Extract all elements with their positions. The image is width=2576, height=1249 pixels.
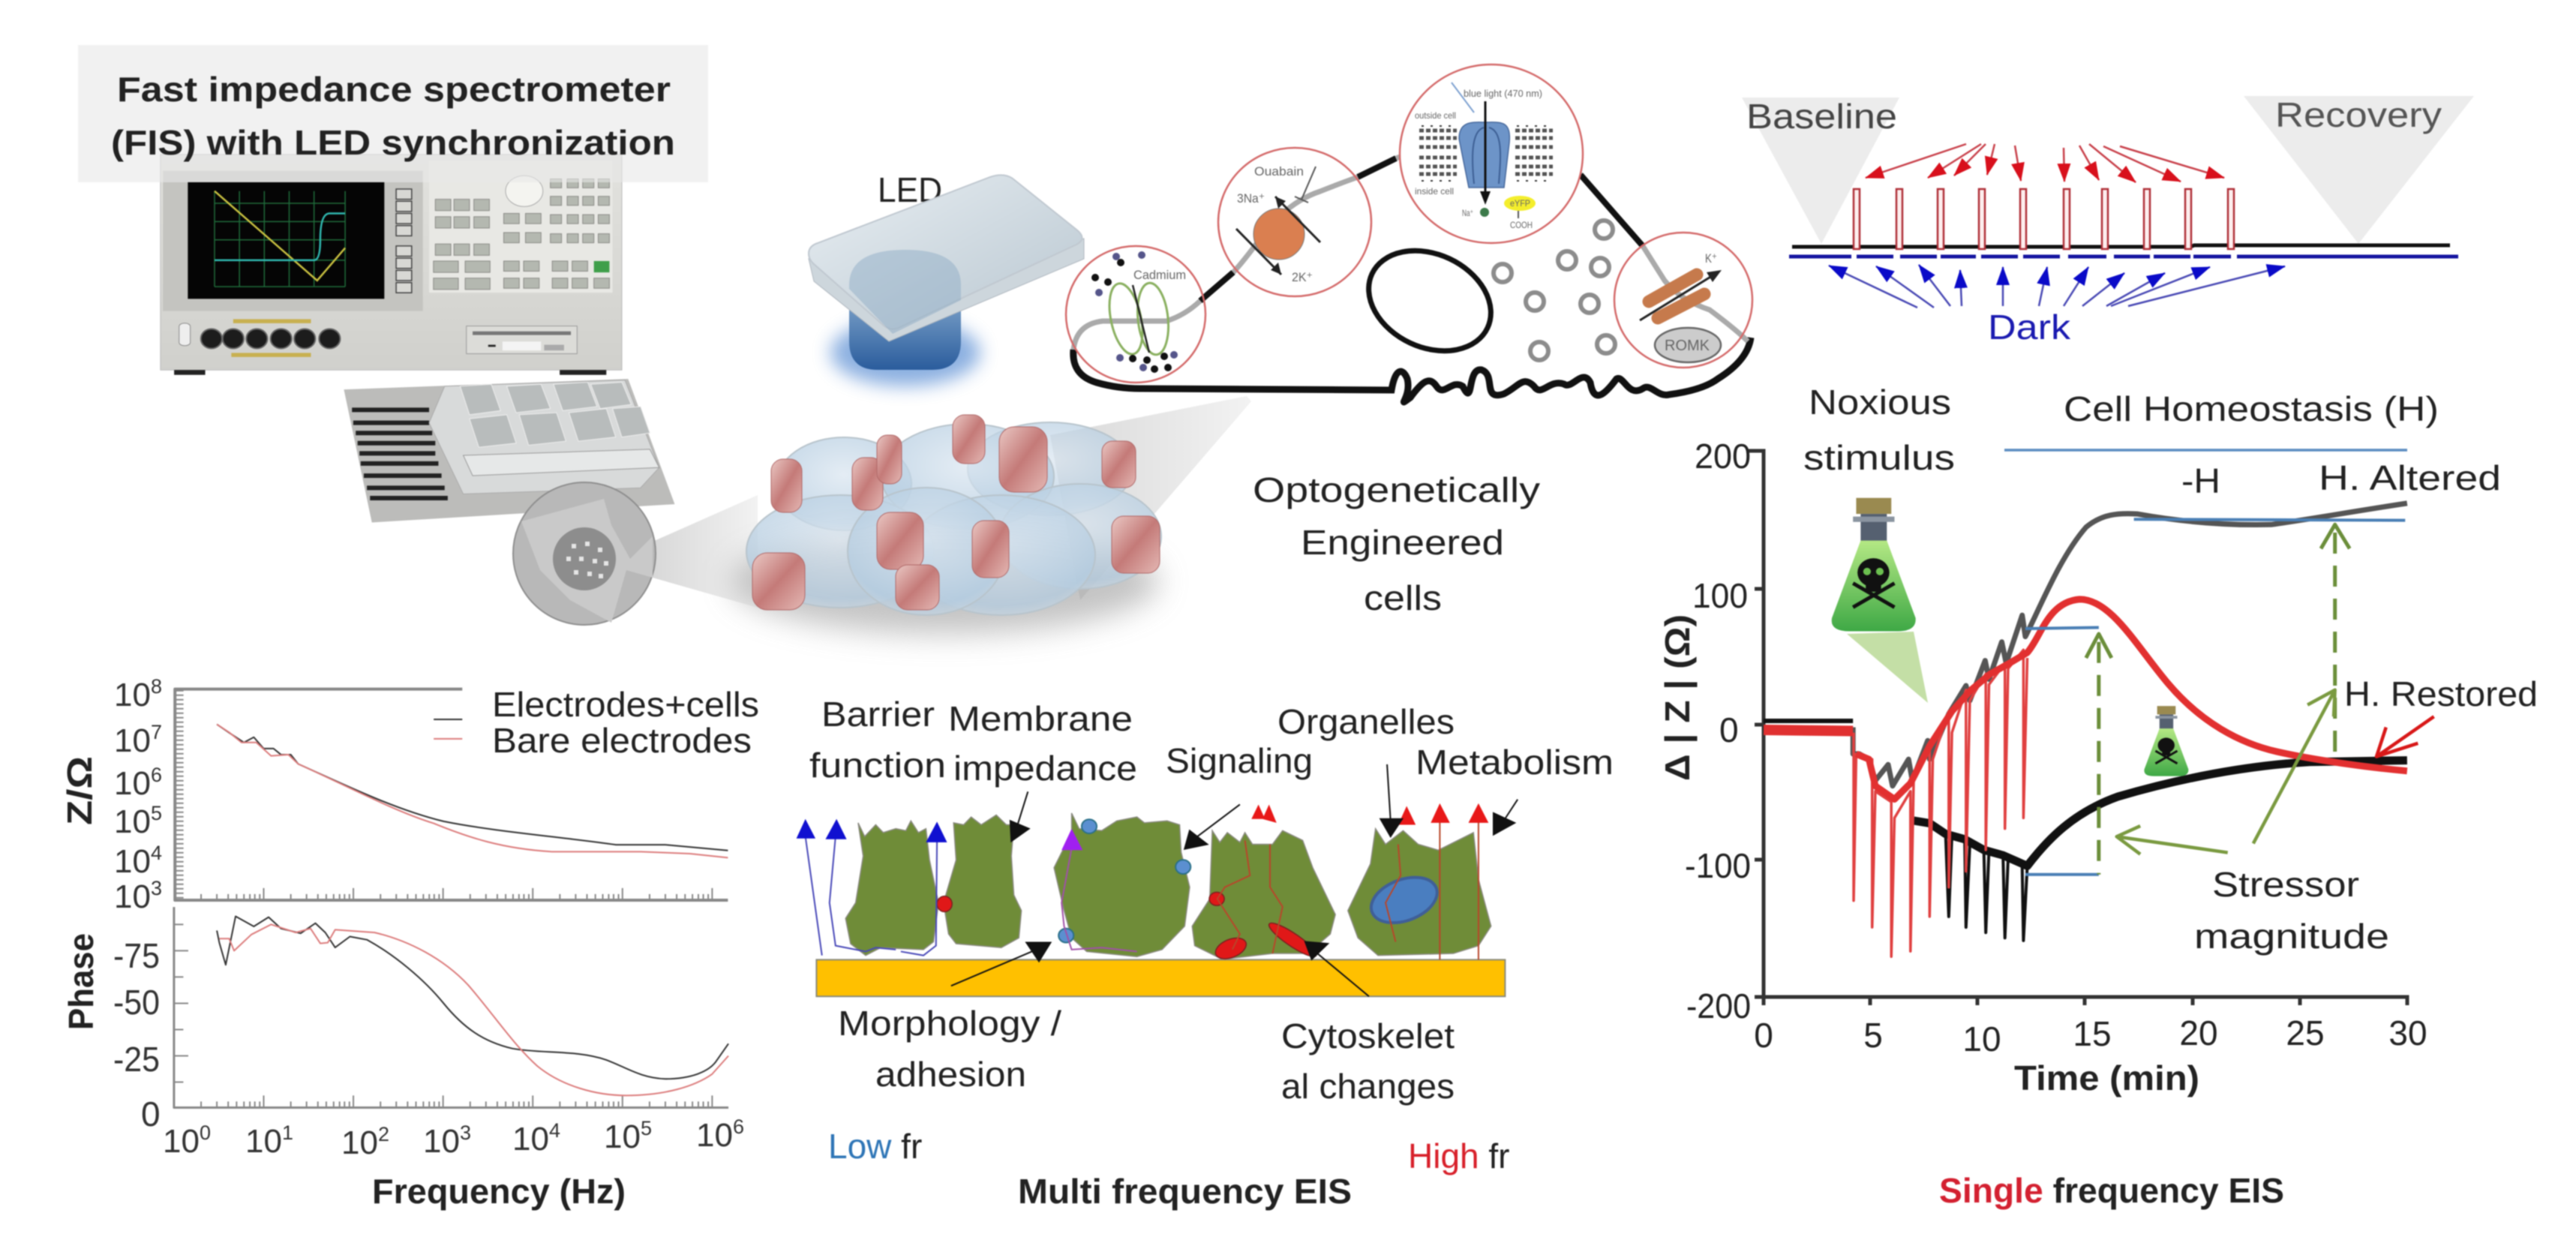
x tick labels: 10 [423, 1123, 460, 1160]
icon: small poison flask [2144, 706, 2188, 776]
label: cadmium: Cadmium [1133, 268, 1186, 282]
y tick labels: 6 [151, 764, 162, 786]
label: membrane impedance: Membrane [948, 699, 1133, 738]
title text: Fast impedance spectrometer [117, 70, 671, 109]
label: ouabain: Ouabain [1254, 164, 1304, 179]
y tick labels: 100 [1692, 576, 1748, 615]
trace: black control [1764, 719, 1853, 723]
label: H. altered: H. Altered [2319, 458, 2501, 497]
label: membrane impedance: impedance [953, 749, 1137, 788]
caption: single frequency EIS: Single frequency EIS [1939, 1171, 2284, 1210]
floppy drive [467, 326, 577, 354]
legend keys [434, 719, 462, 720]
y tick labels: 10 [114, 677, 151, 713]
stressor arrows [2117, 690, 2335, 854]
title box [78, 45, 708, 182]
x axis title: Frequency (Hz) [372, 1172, 626, 1211]
electrode bar [816, 959, 1505, 996]
x tick labels: 10 [341, 1124, 378, 1161]
chart: bode magnitude [60, 675, 759, 915]
red organelles [937, 892, 1321, 963]
trace: red recovery [1764, 730, 1853, 731]
y tick labels: 10 [114, 722, 151, 759]
label: morphology adhesion: adhesion [875, 1055, 1026, 1094]
nucleus [1360, 868, 1449, 932]
lipid bilayer [1419, 131, 1553, 174]
y tick labels [1685, 437, 1751, 1025]
axes [175, 689, 728, 900]
curve: bare electrodes [217, 725, 728, 857]
x tick labels: 10 [604, 1118, 641, 1155]
callout: cadmium channel [1066, 246, 1205, 383]
label: signaling: Signaling [1166, 741, 1313, 780]
icon: led device [809, 175, 1084, 386]
y tick labels [114, 675, 162, 915]
title text line 2: (FIS) with LED synchronization [111, 123, 675, 162]
y tick labels: 10 [114, 843, 151, 880]
label: membrane impedance [948, 699, 1137, 788]
label: morphology adhesion [838, 1004, 1061, 1094]
red junction blocks [752, 415, 1160, 610]
x tick labels: 25 [2286, 1013, 2325, 1052]
label: cytoskeletal changes: al changes [1281, 1067, 1455, 1106]
label: metabolism: Metabolism [1416, 743, 1614, 782]
zoomed electrode circle [513, 482, 656, 625]
x tick labels [1754, 1013, 2427, 1058]
blue arrowheads [797, 819, 947, 842]
label: cytoskeletal changes: Cytoskelet [1281, 1016, 1455, 1055]
y tick labels: 8 [151, 675, 162, 698]
y tick labels: 4 [151, 842, 162, 864]
y axis title: Δ | Z | (Ω) [1658, 614, 1697, 781]
y tick labels: 0 [1719, 710, 1739, 749]
label: optogenetically engineered cells: cells [1364, 578, 1442, 617]
label: H. restored: H. Restored [2344, 674, 2538, 713]
label: eYFP: eYFP [1510, 198, 1530, 209]
label: barrier function: function [809, 746, 946, 785]
cells [845, 813, 1491, 959]
label: high frequency: High fr [1408, 1136, 1509, 1175]
label: optogenetically engineered cells [1253, 470, 1540, 617]
y tick labels: 10 [114, 803, 151, 840]
x axis title: Time (min) [2014, 1058, 2199, 1097]
vesicles [1494, 221, 1615, 360]
x tick labels: 4 [549, 1119, 560, 1142]
label: cell homeostasis: Cell Homeostasis (H) [2064, 389, 2439, 428]
x tick labels: 5 [1863, 1016, 1883, 1055]
electrode array plate [344, 379, 674, 522]
x tick labels: 1 [282, 1121, 293, 1144]
purple arrowhead [1061, 829, 1082, 850]
blue arrows [1829, 265, 2285, 308]
label: morphology adhesion: Morphology / [838, 1004, 1061, 1043]
label: optogenetically engineered cells: Engineered [1301, 523, 1504, 562]
y axis title: Z/Ω [60, 756, 99, 825]
label: ROMK: ROMK [1665, 338, 1710, 354]
label: K+: K⁺ [1705, 251, 1717, 266]
icon: large poison flask [1832, 498, 1916, 632]
y axis and x axis [1749, 451, 2407, 1005]
y tick labels: 0 [141, 1094, 161, 1133]
callout: ROMK channel [1614, 233, 1752, 368]
light line [1792, 245, 2450, 247]
y tick labels: 10 [114, 878, 151, 915]
panel: impedance spectrometer instrument [161, 155, 622, 375]
y tick labels: 200 [1695, 437, 1751, 476]
baseline wedge [1742, 98, 1899, 244]
label: 3Na+: 3Na⁺ [1237, 191, 1265, 206]
recovery wedge [2244, 96, 2474, 244]
legend [492, 685, 759, 760]
y tick labels: -25 [113, 1040, 160, 1079]
label: recovery: Recovery [2275, 95, 2442, 134]
x tick labels [163, 1115, 744, 1161]
zoom wedge: electrode to cells [653, 495, 758, 608]
wedge: cells to single cell [1050, 396, 1251, 600]
label: barrier function [809, 695, 946, 785]
label: COOH: COOH [1510, 220, 1533, 230]
y tick labels: 10 [114, 765, 151, 802]
led label: LED [878, 170, 942, 209]
red arrowheads [1251, 803, 1488, 825]
curve: electrodes plus cells [217, 725, 728, 851]
current paths [806, 821, 1479, 959]
x tick labels: 20 [2179, 1013, 2218, 1052]
x tick labels: 15 [2073, 1014, 2112, 1053]
label: organelles: Organelles [1277, 702, 1455, 741]
legend: Bare electrodes [492, 721, 752, 760]
caption: multi frequency EIS: Multi frequency EIS [1018, 1172, 1352, 1211]
y tick labels: 3 [151, 877, 162, 899]
traces [1764, 503, 2434, 956]
black label arrows [951, 764, 1518, 996]
x tick labels: 10 [245, 1123, 282, 1160]
panel: multi frequency cell diagram [797, 695, 1614, 1175]
chart: bode phase [62, 907, 744, 1211]
label: barrier function: Barrier [821, 695, 935, 734]
label: noxious stimulus: Noxious [1809, 383, 1951, 422]
y tick labels: -50 [113, 983, 160, 1022]
light pulses [1854, 189, 2234, 249]
curve: bare electrodes [219, 924, 728, 1095]
connectors [201, 329, 340, 348]
panel: light pulse protocol [1742, 95, 2474, 347]
label: inside cell: inside cell [1415, 186, 1454, 197]
x tick labels: 10 [512, 1121, 549, 1157]
stressor levels [2025, 519, 2405, 875]
panel: engineered cell cluster [731, 415, 1161, 634]
label: stressor magnitude [2194, 865, 2389, 956]
keypad [429, 161, 613, 293]
label: stressor magnitude: magnitude [2194, 917, 2389, 956]
label: outside cell: outside cell [1415, 110, 1456, 121]
y tick labels: -75 [113, 936, 160, 975]
dashed stressor arrows [2099, 533, 2335, 875]
y tick labels [113, 936, 161, 1133]
panel: single cell schematic [1066, 65, 1752, 402]
soft keys [396, 189, 412, 293]
nucleus [1353, 232, 1507, 370]
curve: electrodes plus cells [217, 917, 728, 1079]
axes [174, 907, 728, 1108]
label: low frequency: Low fr [828, 1127, 922, 1166]
chart: single frequency impedance time course [1658, 437, 2538, 1097]
label: cytoskeletal changes [1281, 1016, 1455, 1106]
dark line segments [1789, 255, 2458, 258]
x tick labels: 10 [696, 1117, 733, 1154]
y axis title: Phase [62, 933, 101, 1030]
electrode leads [352, 410, 448, 498]
label: stressor magnitude: Stressor [2212, 865, 2359, 904]
x tick labels: 6 [733, 1115, 744, 1138]
x tick labels: 0 [200, 1121, 211, 1144]
label: dark: Dark [1988, 308, 2071, 347]
transparent cell bodies [746, 422, 1161, 615]
x tick labels: 2 [378, 1123, 389, 1145]
x tick labels: 3 [460, 1121, 471, 1144]
light green cone [1847, 632, 1928, 703]
label: blue light: blue light (470 nm) [1464, 88, 1542, 99]
cell membrane [1073, 338, 1751, 402]
red arrows [1866, 144, 2224, 182]
label: 2K+: 2K⁺ [1292, 270, 1313, 284]
y tick labels: -200 [1686, 986, 1751, 1025]
label: -H: -H [2181, 461, 2220, 500]
y tick labels: -100 [1685, 846, 1751, 885]
y tick labels: 7 [151, 721, 162, 743]
label: baseline: Baseline [1746, 97, 1897, 136]
label: noxious stimulus: stimulus [1803, 438, 1955, 477]
label: optogenetically engineered cells: Optogenetically [1253, 470, 1540, 509]
trace: red spikes [1854, 650, 2028, 956]
x tick labels: 0 [1754, 1016, 1773, 1055]
multi-well block [429, 380, 659, 494]
x tick labels: 10 [163, 1123, 200, 1160]
x tick labels: 30 [2388, 1013, 2427, 1052]
callout: channelrhodopsin [1400, 65, 1583, 243]
restored arrow [2376, 716, 2434, 757]
label: noxious stimulus [1803, 383, 1955, 477]
homeostasis bar [2004, 449, 2407, 452]
trace: altered homeostasis [1853, 503, 2407, 786]
legend: Electrodes+cells [492, 685, 759, 724]
y tick labels: 5 [151, 802, 162, 824]
x tick labels: 5 [641, 1117, 652, 1139]
x tick labels: 10 [1962, 1019, 2001, 1058]
callout: Na/K pump [1218, 148, 1371, 296]
blue receptors [1058, 819, 1190, 942]
instrument screen [188, 182, 384, 299]
label: Na+: Na⁺ [1462, 208, 1473, 218]
